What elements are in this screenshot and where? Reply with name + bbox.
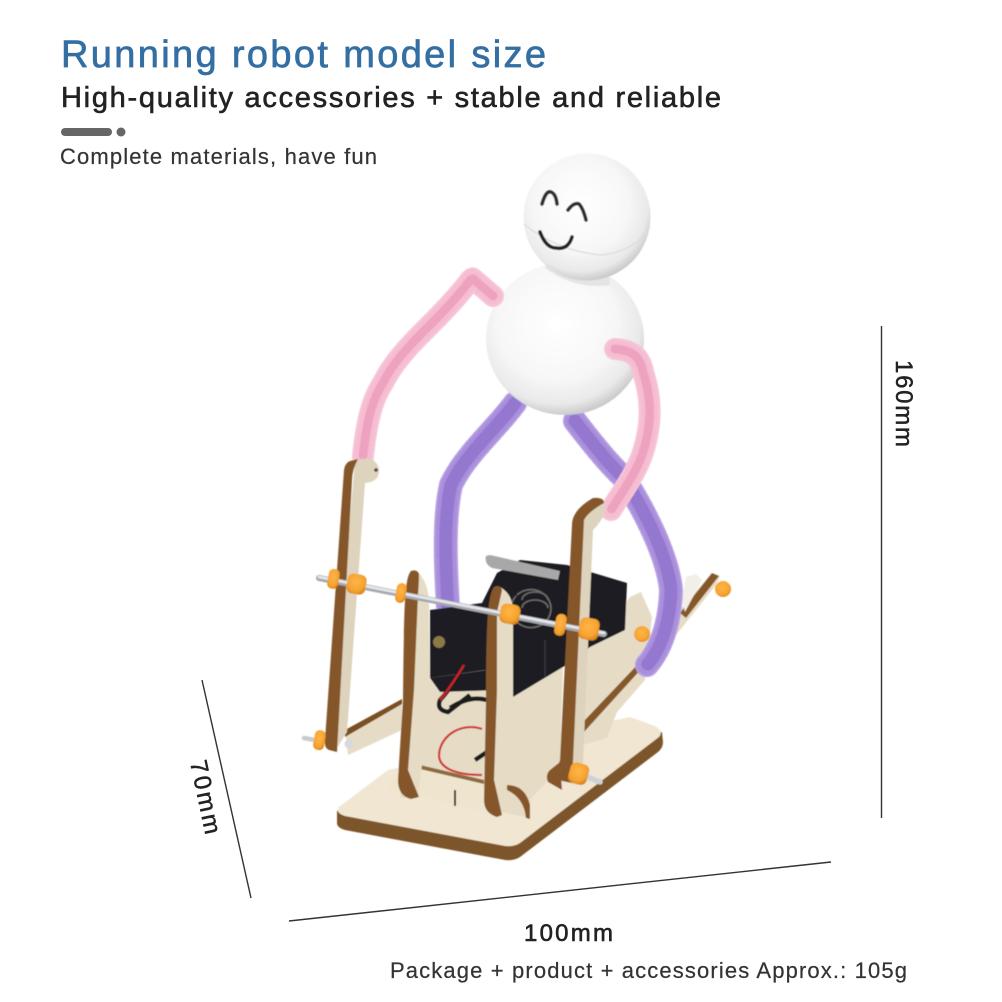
middle left upright plate	[398, 570, 430, 799]
middle right upright plate	[484, 586, 563, 819]
left purple leg	[446, 403, 515, 608]
inner wall with red and black wires	[420, 665, 500, 782]
wooden base plate	[337, 717, 663, 860]
robot head with smiling face	[524, 154, 650, 286]
decorative pill and dot marker	[61, 128, 126, 136]
dimension line: length	[289, 862, 831, 921]
dimension label: 100mm: 100mm	[524, 920, 613, 947]
left pink arm	[363, 278, 493, 456]
front lower panel	[388, 765, 484, 812]
robot body sphere	[486, 263, 644, 415]
dimension label: 70mm: 70mm	[184, 758, 226, 837]
weight note: Package + product + accessories Approx.: 105g	[390, 958, 907, 983]
dimension line: width	[202, 680, 251, 898]
subtitle: High-quality accessories + stable and reliable	[61, 82, 721, 114]
lower steel pin and spacers	[304, 729, 600, 786]
tagline: Complete materials, have fun	[60, 144, 377, 169]
steel axle with orange spacers	[319, 568, 604, 642]
right pink arm	[611, 349, 650, 510]
lower left link	[344, 699, 402, 755]
left arm bar	[325, 458, 379, 752]
rear wedge and angled arm	[583, 573, 731, 745]
battery holder	[430, 555, 627, 697]
dimension line: height	[880, 326, 882, 818]
right upright arm plate	[547, 498, 606, 790]
title: Running robot model size	[61, 34, 546, 76]
right purple leg	[575, 421, 671, 665]
dimension label: 160mm: 160mm	[890, 360, 917, 447]
robot model photo illustration	[304, 154, 731, 860]
